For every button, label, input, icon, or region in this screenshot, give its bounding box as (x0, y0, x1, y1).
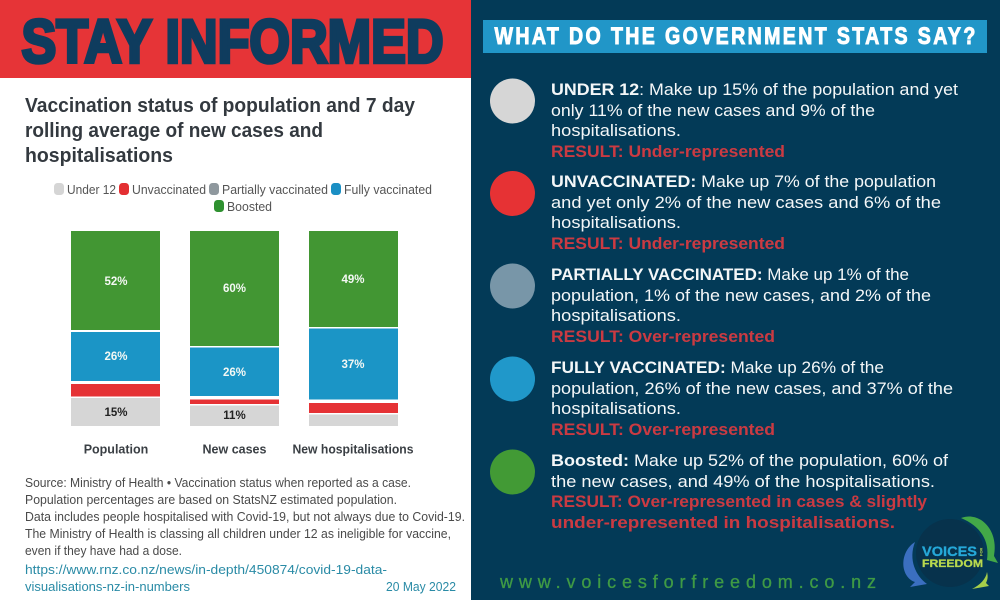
panel: chart heading: Vaccination status of population and 7 day (25, 95, 416, 117)
source notes: The Ministry of Health is classing all children under 12 as ineligible for vaccine, (25, 527, 451, 541)
item: boosted: Boosted: Make up 52% of the population, 60% of (551, 451, 948, 470)
item: boosted (490, 450, 948, 532)
item: unvaccinated: hospitalisations. (551, 213, 681, 232)
item: boosted: RESULT: Over-represented in cases & slightly (551, 492, 928, 511)
item: unvaccinated: and yet only 2% of the new cases and 6% of the (551, 193, 941, 212)
date: 20 May 2022 (386, 580, 456, 594)
icon: green speech crescent (961, 517, 998, 563)
icon: lime speech crescent (972, 572, 989, 589)
source notes: Data includes people hospitalised with Covid-19, but not always due to Covid-19. (25, 510, 465, 524)
panel: chart heading (25, 95, 416, 167)
source notes: Population percentages are based on StatsNZ estimated population. (25, 493, 397, 507)
item: unvaccinated: UNVACCINATED: Make up 7% of the population (551, 172, 936, 191)
item: partially vaccinated: RESULT: Over-represented (551, 327, 775, 346)
source link: https://www.rnz.co.nz/news/in-depth/450874/covid-19-data- (25, 563, 387, 577)
item: fully vaccinated: RESULT: Over-represented (551, 420, 775, 439)
source link: visualisations-nz-in-numbers (25, 580, 190, 594)
item: under 12: UNDER 12: Make up 15% of the population and yet (551, 80, 958, 99)
chart legend (54, 183, 432, 214)
item: partially vaccinated: PARTIALLY VACCINATED: Make up 1% of the (551, 265, 909, 284)
logo: voices for freedom (903, 517, 998, 589)
item: fully vaccinated: population, 26% of the new cases, and 37% of the (551, 379, 953, 398)
item: under 12 (490, 78, 958, 161)
bar: new hospitalisations: 37% (341, 359, 365, 371)
icon: blue speech crescent (903, 542, 927, 587)
chart legend: Fully vaccinated (344, 183, 432, 197)
item: unvaccinated: RESULT: Under-represented (551, 234, 785, 253)
logo: voices for freedom: VOICES (922, 543, 977, 559)
source link (25, 563, 387, 594)
source notes (25, 476, 465, 558)
chart legend: Partially vaccinated (222, 183, 328, 197)
bar: new hospitalisations: 49% (341, 274, 365, 286)
bar: new hospitalisations (292, 231, 414, 456)
item: fully vaccinated (490, 356, 953, 439)
bar: population: 52% (104, 276, 128, 288)
stats heading: WHAT DO THE GOVERNMENT STATS SAY? (494, 22, 975, 50)
item: fully vaccinated: FULLY VACCINATED: Make up 26% of the (551, 358, 884, 377)
item: partially vaccinated (490, 264, 931, 346)
website url: www.voicesforfreedom.co.nz (499, 572, 876, 592)
title: STAY INFORMED (22, 8, 444, 76)
item: boosted: under-represented in hospitalisations. (551, 513, 895, 532)
header banner: stay informed (0, 0, 471, 78)
item: fully vaccinated: hospitalisations. (551, 399, 681, 418)
stacked bar chart (71, 231, 414, 456)
bar: new cases: 60% (223, 283, 246, 295)
item: partially vaccinated: population, 1% of the new cases, and 2% of the (551, 286, 931, 305)
chart legend: Under 12 (67, 183, 116, 197)
chart legend: Unvaccinated (132, 183, 206, 197)
panel: government stats (471, 0, 1000, 600)
logo: voices for freedom: FOR (978, 547, 984, 556)
bar: new cases: New cases (203, 442, 267, 456)
bar: new cases: 11% (223, 410, 246, 422)
chart legend: Boosted (227, 200, 272, 214)
item: under 12: hospitalisations. (551, 121, 681, 140)
source notes: even if they have had a dose. (25, 544, 182, 558)
bar: population: 15% (104, 407, 128, 419)
item: partially vaccinated: hospitalisations. (551, 306, 681, 325)
bar: population (71, 231, 160, 456)
bar: new cases: 26% (223, 367, 246, 379)
panel: chart heading: rolling average of new cases and (25, 120, 323, 142)
bar: population: Population (84, 442, 148, 456)
item: unvaccinated (490, 171, 941, 253)
panel: chart heading: hospitalisations (25, 145, 173, 167)
item: under 12: only 11% of the new cases and 9% of the (551, 101, 875, 120)
bar: new cases (190, 231, 279, 456)
source notes: Source: Ministry of Health • Vaccination status when reported as a case. (25, 476, 411, 490)
item: under 12: RESULT: Under-represented (551, 142, 785, 161)
logo: voices for freedom: FREEDOM (922, 558, 983, 570)
item: boosted: the new cases, and 49% of the hospitalisations. (551, 472, 935, 491)
bar: new hospitalisations: New hospitalisations (292, 442, 414, 456)
bar: population: 26% (104, 351, 128, 363)
